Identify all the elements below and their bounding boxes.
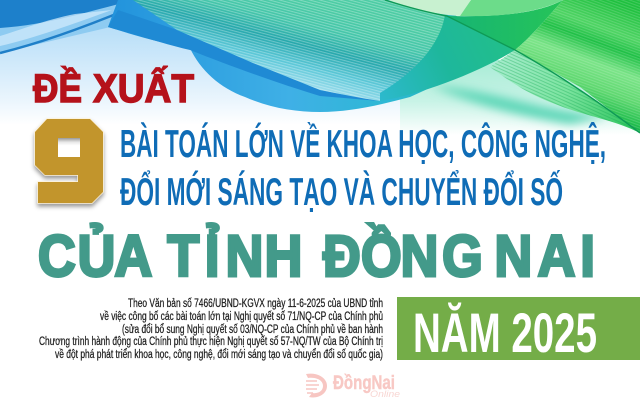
- big number 9: [32, 118, 106, 210]
- heading: ĐỀ XUẤT: ĐỀ: [33, 65, 82, 111]
- source text block: về việc công bố các bài toán lớn tại Nghị quyết số 71/NQ-CP của Chính phủ: [100, 311, 383, 323]
- heading: CỦA TỈNH ĐỒNG NAI: ĐỒNG: [323, 223, 483, 289]
- logo: Đồng Nai Online: ĐồngNai: [333, 373, 395, 394]
- source text block: (sửa đổi bổ sung Nghị quyết số 03/NQ-CP của Chính phủ về ban hành: [122, 324, 383, 336]
- source text block: Chương trình hành động của Chính phủ thực hiện Nghị quyết số 57-NQ/TW của Bộ Chính trị: [39, 336, 383, 348]
- heading: ĐỀ XUẤT: [33, 65, 194, 111]
- decorative wave header: [0, 0, 640, 135]
- heading: CỦA TỈNH ĐỒNG NAI: [38, 223, 595, 289]
- heading: CỦA TỈNH ĐỒNG NAI: TỈNH: [167, 223, 302, 289]
- heading: CỦA TỈNH ĐỒNG NAI: CỦA: [38, 223, 152, 289]
- logo: Đồng Nai Online: Online: [370, 389, 400, 399]
- heading: CỦA TỈNH ĐỒNG NAI: NAI: [495, 223, 595, 289]
- source text block: [39, 298, 383, 361]
- source text block: Theo Văn bản số 7466/UBND-KGVX ngày 11-6-2025 của UBND tỉnh: [128, 298, 383, 310]
- heading: ĐỀ XUẤT: XUẤT: [93, 65, 194, 111]
- source text block: về đột phá phát triển khoa học, công nghệ, đổi mới sáng tạo và chuyển đổi số quốc gia): [55, 349, 383, 361]
- big number 9: 9: [26, 97, 105, 235]
- logo: Đồng Nai Online: [306, 373, 400, 399]
